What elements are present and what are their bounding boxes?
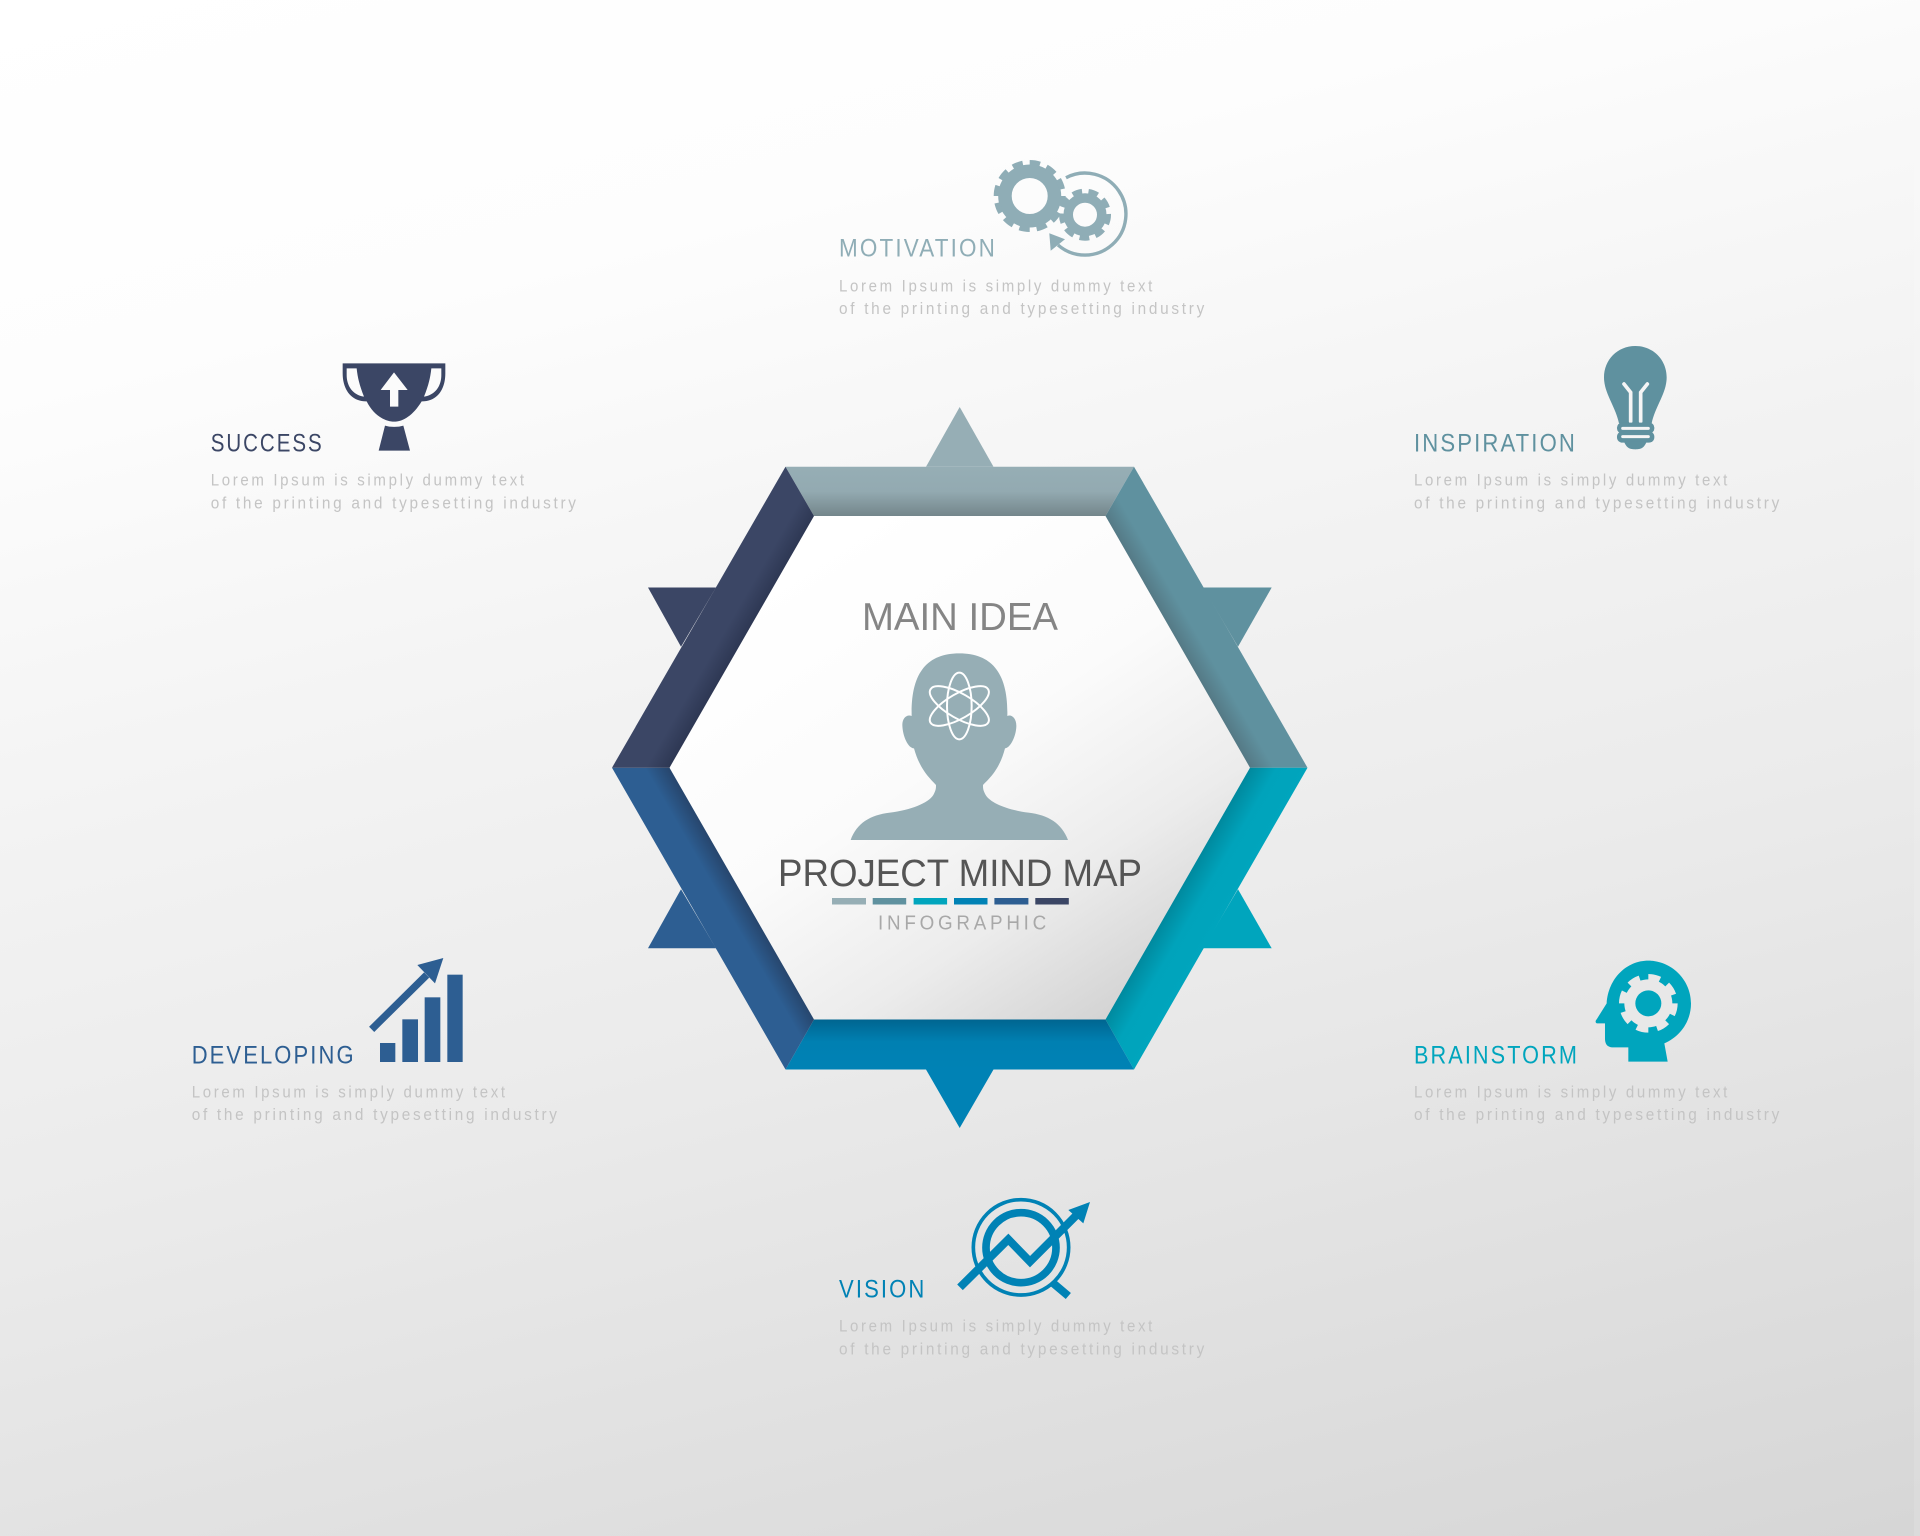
hexagon segment: lower right (1106, 768, 1308, 1070)
description: Lorem Ipsum is simply dummy text (1414, 1082, 1730, 1101)
hexagon segment: top (786, 467, 1134, 516)
description: of the printing and typesetting industry (1414, 493, 1782, 512)
star point: lower right (1203, 889, 1272, 948)
icon: magnifier with trend arrow (960, 1200, 1090, 1296)
star point: upper right (1203, 588, 1272, 647)
heading: DEVELOPING (192, 1041, 356, 1069)
block: motivation (839, 163, 1207, 318)
inner hexagon panel (670, 516, 1250, 1020)
description: Lorem Ipsum is simply dummy text (192, 1082, 508, 1101)
description: of the printing and typesetting industry (839, 299, 1207, 318)
star point: bottom (926, 1070, 994, 1128)
description: of the printing and typesetting industry (192, 1105, 560, 1124)
icon: light bulb (1604, 346, 1667, 449)
hexagon segment: lower left (612, 768, 814, 1070)
title: project mind map: PROJECT MIND MAP (778, 853, 1142, 895)
heading: MOTIVATION (839, 235, 997, 263)
hexagon segment: upper right (1106, 467, 1308, 768)
block: developing (192, 958, 560, 1124)
star point: upper left (648, 588, 716, 647)
subtitle: infographic: INFOGRAPHIC (878, 912, 1050, 934)
heading: VISION (839, 1275, 926, 1303)
heading: INSPIRATION (1414, 429, 1577, 457)
colour swatches (832, 898, 1069, 904)
description: of the printing and typesetting industry (211, 493, 579, 512)
description: Lorem Ipsum is simply dummy text (839, 1317, 1155, 1336)
block: vision (839, 1200, 1207, 1358)
description: Lorem Ipsum is simply dummy text (839, 276, 1155, 295)
block: brainstorm (1414, 961, 1782, 1124)
icon: trophy (343, 363, 445, 451)
central hexagon diagram (612, 407, 1308, 1128)
star point: lower left (648, 889, 716, 948)
star point: top (926, 407, 994, 467)
block: inspiration (1414, 346, 1782, 512)
description: Lorem Ipsum is simply dummy text (211, 471, 527, 490)
heading: SUCCESS (211, 429, 324, 457)
icon: gears with cycle arrow (997, 163, 1126, 255)
heading: BRAINSTORM (1414, 1041, 1579, 1069)
icon: head with gear (1596, 961, 1691, 1062)
hexagon segment: upper left (612, 467, 814, 768)
description: of the printing and typesetting industry (1414, 1105, 1782, 1124)
description: Lorem Ipsum is simply dummy text (1414, 471, 1730, 490)
heading: main idea: MAIN IDEA (862, 596, 1058, 639)
description: of the printing and typesetting industry (839, 1339, 1207, 1358)
icon: rising bar chart with arrow (372, 958, 463, 1062)
block: success (211, 363, 579, 512)
icon: head with atom (851, 653, 1068, 840)
hexagon segment: bottom (786, 1020, 1134, 1070)
